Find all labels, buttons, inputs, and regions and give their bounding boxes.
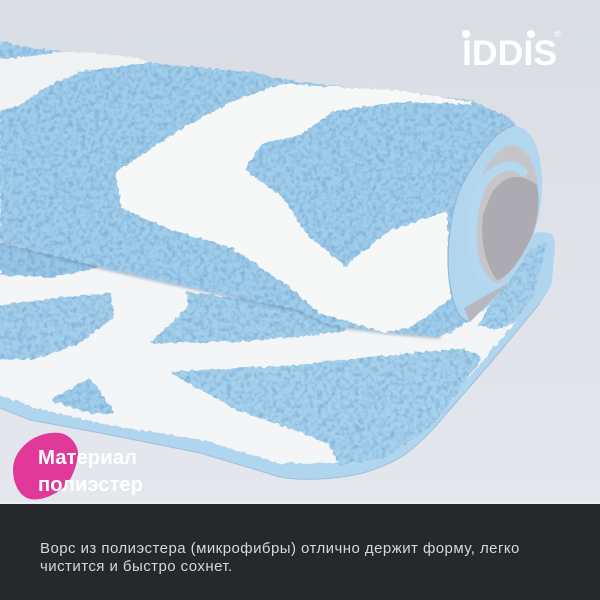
caption text: чистится и быстро сохнет. bbox=[40, 558, 233, 575]
material label bbox=[38, 447, 143, 496]
roll end stitching bbox=[448, 126, 513, 321]
blue patch: large lower right bbox=[173, 350, 480, 464]
roll underside backing bbox=[468, 145, 538, 287]
lower mat layer bbox=[0, 232, 555, 479]
label line 1: Материал bbox=[38, 447, 137, 469]
fold flap under roll bbox=[464, 282, 510, 322]
caption panel bbox=[0, 504, 600, 600]
logo i dot bbox=[462, 30, 470, 38]
upper rolled mat bbox=[0, 42, 542, 337]
label line 2: полиэстер bbox=[38, 474, 143, 496]
contact shadow bbox=[0, 242, 440, 337]
pink blob bbox=[13, 433, 78, 499]
mat edge binding bbox=[0, 232, 555, 479]
blue patch: centre bbox=[153, 293, 345, 342]
binding stitch line bbox=[0, 303, 540, 479]
blue patch: small lower left bbox=[53, 380, 113, 412]
blue patch: right corner bbox=[478, 240, 548, 330]
roll pile bbox=[0, 42, 525, 337]
caption text: Ворс из полиэстера (микрофибры) отлично держит форму, легко bbox=[40, 540, 520, 557]
panel top highlight bbox=[0, 502, 600, 504]
inner ring binding bbox=[472, 166, 523, 287]
blue patch: top strip bbox=[0, 243, 100, 277]
blue patch: left diamond bbox=[0, 295, 112, 358]
logo: IDDIS bbox=[462, 29, 561, 73]
blue patches bbox=[0, 240, 548, 464]
logo wordmark: IDDIS bbox=[462, 34, 557, 73]
logo i dot second bbox=[527, 30, 535, 38]
lower mat pile bbox=[0, 240, 548, 464]
caption text bbox=[40, 540, 520, 575]
inner backing dark mesh bbox=[482, 177, 538, 280]
white stripe: top left bbox=[0, 52, 147, 110]
roll end binding ring bbox=[448, 126, 542, 321]
white chevron bbox=[117, 85, 470, 331]
registered mark: ® bbox=[554, 29, 561, 39]
